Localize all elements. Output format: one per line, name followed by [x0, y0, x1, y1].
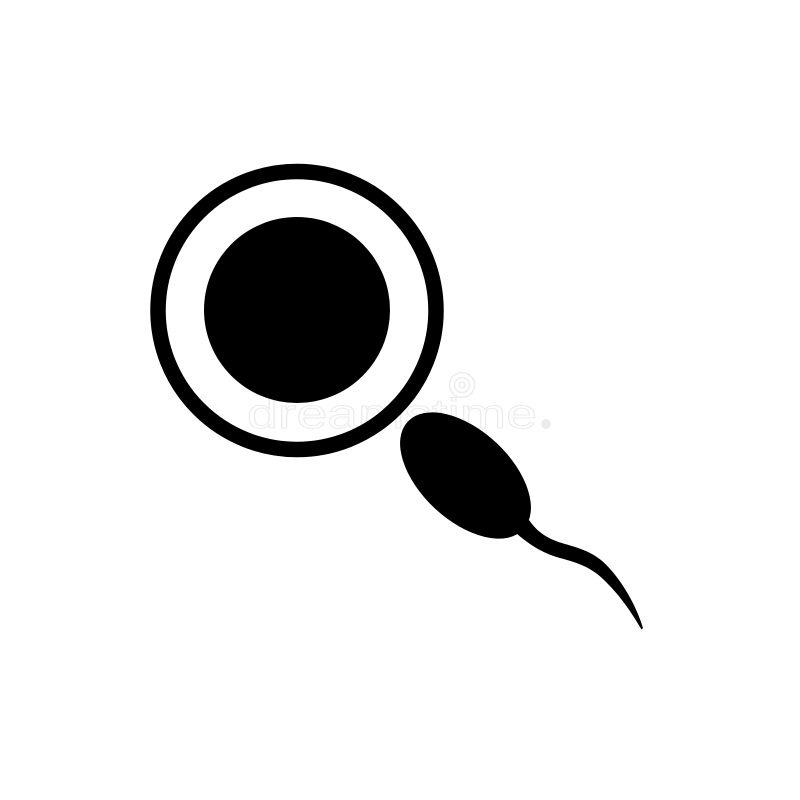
sperm tail	[516, 520, 643, 630]
sperm head	[377, 389, 554, 562]
icon: egg cell	[158, 172, 436, 450]
watermark: dreamstime	[247, 372, 551, 437]
watermark logo	[450, 372, 474, 398]
watermark text: dreamstime	[247, 390, 537, 437]
egg nucleus	[204, 217, 390, 403]
icon: sperm cell	[377, 389, 643, 630]
egg outer membrane ring	[158, 172, 436, 450]
watermark registered dot	[541, 419, 551, 429]
